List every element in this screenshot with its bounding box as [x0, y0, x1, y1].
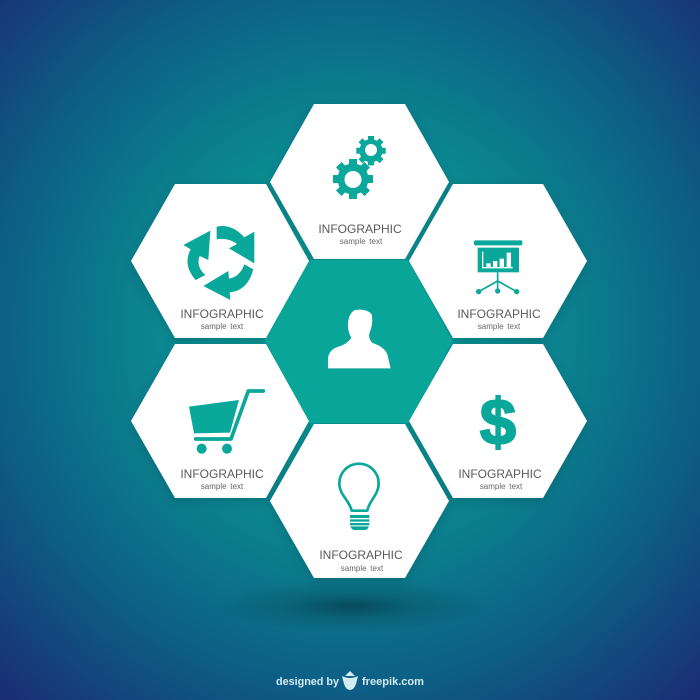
icon: presentation board	[474, 240, 522, 294]
icon: freepik logo	[342, 671, 358, 690]
label: sample text	[341, 564, 384, 573]
ground shadow	[212, 580, 492, 632]
label: INFOGRAPHIC	[318, 222, 402, 236]
footer credit: designed by	[276, 676, 340, 688]
label: sample text	[480, 482, 523, 491]
label: sample text	[478, 322, 521, 331]
label: INFOGRAPHIC	[319, 548, 403, 562]
label: INFOGRAPHIC	[457, 307, 541, 321]
label: sample text	[201, 482, 244, 491]
icon: dollar sign: $	[480, 385, 516, 458]
label: sample text	[340, 237, 383, 246]
icon: gears	[333, 136, 386, 199]
label: INFOGRAPHIC	[180, 307, 264, 321]
panel: upper left hexagon recycle	[131, 184, 309, 338]
icon: person silhouette	[328, 310, 391, 368]
footer credit	[276, 671, 424, 690]
label	[180, 467, 264, 491]
panel: bottom hexagon bulb	[270, 424, 449, 578]
label	[318, 222, 402, 246]
footer credit: freepik.com	[362, 676, 424, 688]
label	[319, 548, 403, 573]
label	[457, 307, 541, 331]
label	[180, 307, 264, 331]
panel: center hexagon	[265, 260, 453, 423]
label: sample text	[201, 322, 244, 331]
label: INFOGRAPHIC	[180, 467, 264, 481]
panel: lower left hexagon cart	[131, 344, 309, 498]
label	[458, 467, 542, 491]
icon: shopping cart	[189, 391, 263, 454]
panel: lower right hexagon dollar	[409, 344, 587, 498]
panel: top hexagon gears	[270, 104, 449, 259]
icon: recycle arrows	[183, 226, 254, 300]
panel: upper right hexagon presentation	[409, 184, 587, 338]
icon: light bulb	[339, 464, 379, 530]
label: INFOGRAPHIC	[458, 467, 542, 481]
